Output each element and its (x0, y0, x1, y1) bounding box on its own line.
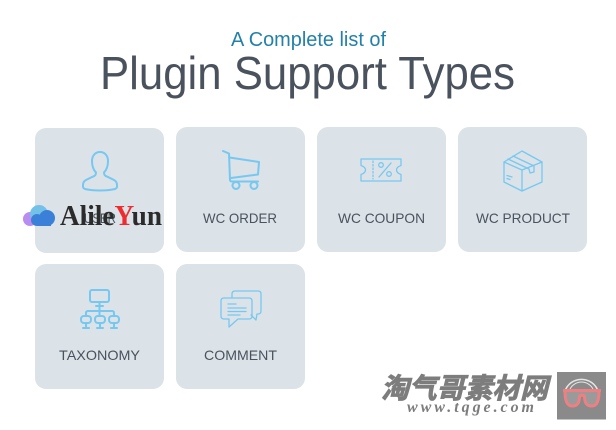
panel: user (35, 128, 164, 253)
label: wc coupon: WC COUPON (338, 210, 425, 226)
icon: cloud (23, 205, 55, 226)
label: taxonomy: TAXONOMY (59, 347, 141, 363)
subtitle: A Complete list of (231, 29, 386, 51)
panel: taxonomy (35, 264, 164, 389)
label: user: USER (84, 210, 116, 226)
panel: wc coupon (317, 127, 446, 252)
title: Plugin Support Types (100, 47, 515, 99)
label: wc product: WC PRODUCT (476, 210, 570, 226)
icon: user (83, 152, 117, 190)
icon: cart (223, 151, 259, 189)
watermark: glasses badge (557, 372, 606, 420)
panel: comment (176, 264, 305, 389)
watermark text: AlileYun (60, 200, 162, 232)
icon: speech bubbles (221, 291, 261, 327)
label: comment: COMMENT (204, 347, 277, 363)
watermark: tqge text: 淘气哥素材网 (381, 373, 552, 404)
icon: hierarchy (81, 290, 119, 328)
label: wc order: WC ORDER (203, 210, 277, 226)
panel: wc product (458, 127, 587, 252)
watermark: tqge text: www.tqge.com (407, 399, 534, 416)
panel: wc order (176, 127, 305, 252)
watermark: alileyun logo (23, 200, 162, 232)
icon: box (504, 151, 542, 191)
icon: coupon (361, 159, 401, 181)
